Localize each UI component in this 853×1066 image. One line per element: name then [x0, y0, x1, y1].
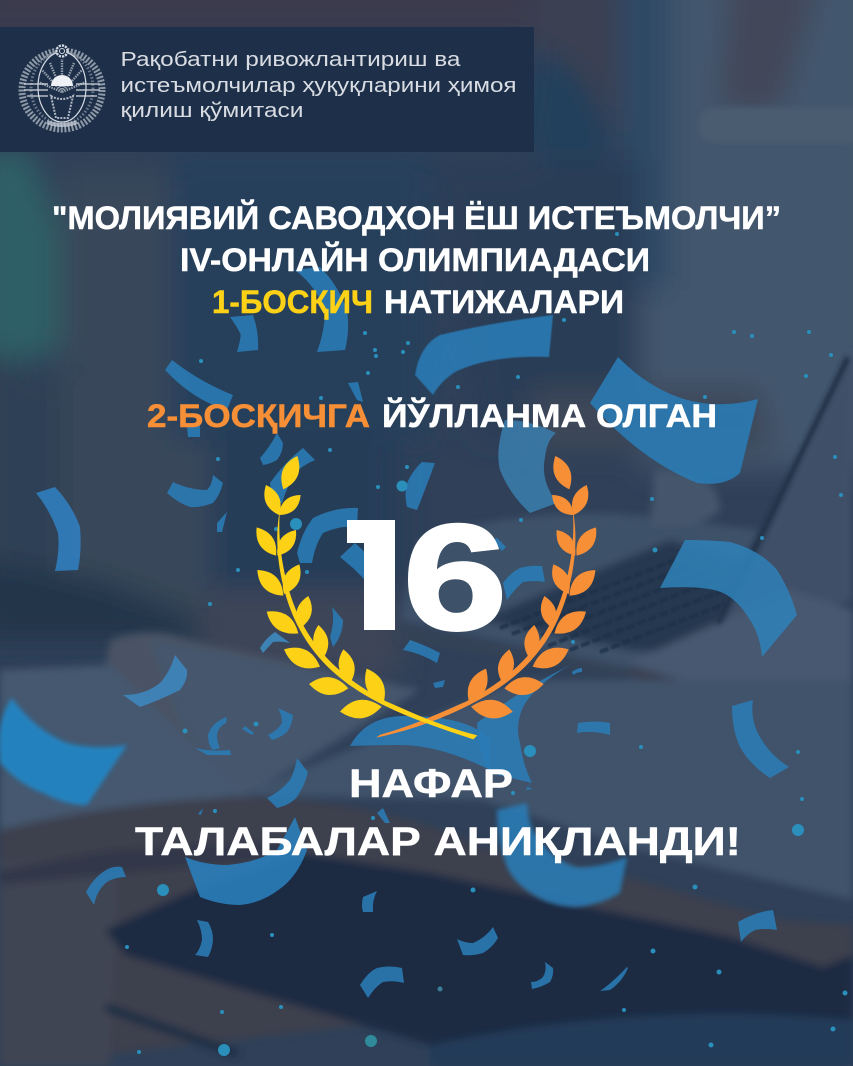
icon: orange laurel branch	[376, 456, 596, 738]
icon: laurel wreath	[256, 456, 596, 739]
text block: committee name: қилиш қўмитаси	[120, 100, 304, 122]
text block: students identified: ТАЛАБАЛАР АНИҚЛАНДИ!	[135, 820, 741, 864]
icon: state emblem of Uzbekistan	[22, 46, 102, 129]
subheading: second stage: 2-БОСҚИЧГА	[147, 398, 370, 434]
keyboard rows	[500, 560, 725, 652]
subheading: second stage: ЙЎЛЛАНМА ОЛГАН	[382, 398, 717, 434]
title: olympiad heading	[52, 200, 781, 320]
title: olympiad heading: НАТИЖАЛАРИ	[384, 284, 624, 320]
big number: 16: 1	[333, 488, 421, 664]
text block: committee name: Рақобатни ривожлантириш ва	[120, 49, 462, 71]
big number: 16	[347, 520, 502, 632]
icon: yellow laurel branch	[256, 456, 477, 739]
text block: committee name: истеъмолчилар ҳуқуқларини ҳимоя	[120, 75, 516, 97]
title: olympiad heading: "МОЛИЯВИЙ САВОДХОН ЁШ ИСТЕЪМОЛЧИ”	[52, 200, 781, 236]
confetti ribbons	[0, 267, 797, 998]
title: olympiad heading: IV-ОНЛАЙН ОЛИМПИАДАСИ	[180, 242, 650, 278]
panel: committee header	[0, 27, 534, 152]
text block: committee name	[120, 49, 516, 122]
text block: students identified	[135, 762, 741, 864]
subheading: second stage	[147, 398, 717, 434]
title: olympiad heading: 1-БОСҚИЧ	[212, 284, 373, 320]
text block: students identified: НАФАР	[349, 762, 513, 806]
big number: 16: 6	[403, 493, 507, 661]
confetti dots	[125, 232, 848, 1056]
